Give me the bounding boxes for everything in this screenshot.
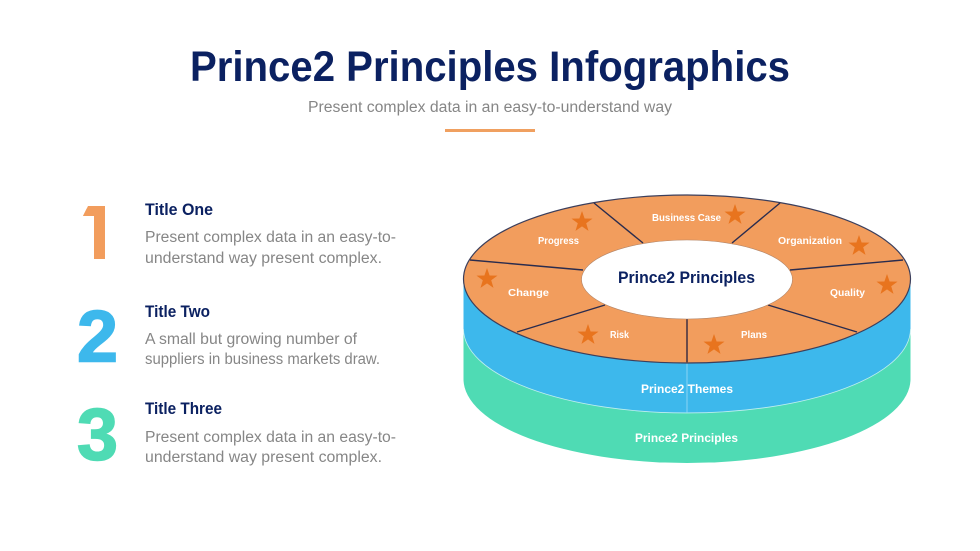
blue middle layer	[464, 279, 910, 413]
star icon	[848, 235, 870, 255]
star icon	[572, 211, 592, 231]
star icon	[476, 268, 498, 288]
segment: Change: Change	[508, 287, 549, 299]
segment: Progress	[538, 211, 592, 247]
star icon	[724, 204, 746, 224]
segment: Plans	[704, 329, 767, 354]
green base layer	[464, 329, 910, 463]
item two text	[145, 331, 380, 368]
star icon	[704, 334, 724, 354]
item one text: understand way present complex.	[145, 250, 382, 267]
item three text: understand way present complex.	[145, 449, 382, 466]
number 3: 3	[77, 394, 118, 476]
segment dividers	[470, 203, 903, 363]
item two text: A small but growing number of	[145, 331, 358, 348]
item three	[77, 394, 396, 476]
stacked cylinder diagram	[464, 195, 910, 463]
segment: Risk	[578, 324, 629, 344]
item three text	[145, 429, 396, 466]
segment: Change	[476, 268, 549, 299]
item three text: Present complex data in an easy-to-	[145, 429, 396, 446]
item two text: suppliers in business markets draw.	[145, 351, 380, 368]
number 1: 1	[72, 186, 126, 280]
item one text	[145, 229, 396, 267]
segment: Quality	[830, 274, 898, 299]
orange top ring	[464, 195, 910, 363]
segment: Plans: Plans	[741, 329, 767, 341]
item two	[77, 296, 380, 378]
item one	[83, 203, 396, 266]
item one text: Present complex data in an easy-to-	[145, 229, 396, 246]
item three heading: Title Three	[145, 400, 222, 418]
item two heading: Title Two	[145, 303, 210, 321]
label: Prince2 Themes: Prince2 Themes	[641, 382, 733, 396]
segment: Business Case	[652, 204, 746, 224]
title: Prince2 Principles Infographics	[190, 43, 790, 91]
label: Prince2 Principles: Prince2 Principles	[635, 431, 738, 445]
star icon	[578, 324, 598, 344]
segment: Risk: Risk	[610, 329, 629, 341]
item one heading: Title One	[145, 201, 213, 219]
segment: Organization	[778, 235, 870, 255]
accent rule	[445, 129, 535, 132]
segment: Quality: Quality	[830, 287, 865, 299]
star icon	[876, 274, 898, 294]
segment: Business Case: Business Case	[652, 212, 721, 224]
number 2: 2	[77, 296, 118, 378]
centre label: Prince2 Principles	[618, 268, 755, 287]
subtitle: Present complex data in an easy-to-understand way	[308, 99, 672, 116]
segment: Organization: Organization	[778, 235, 842, 247]
segment: Progress: Progress	[538, 235, 579, 247]
centre hole	[582, 240, 792, 319]
